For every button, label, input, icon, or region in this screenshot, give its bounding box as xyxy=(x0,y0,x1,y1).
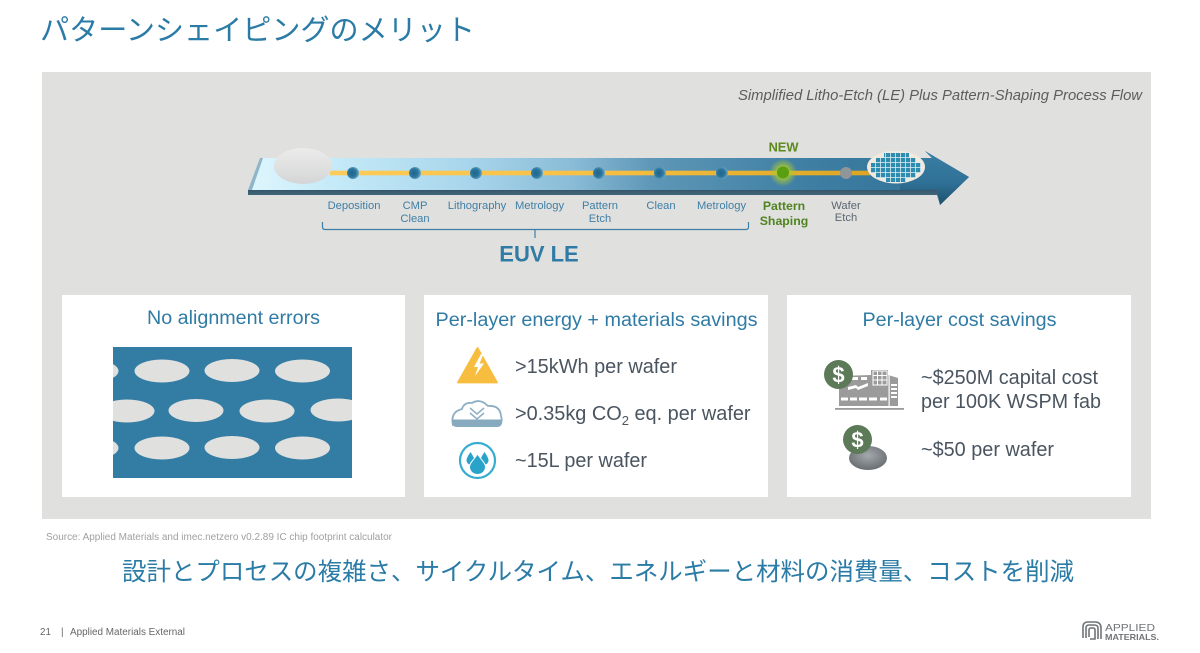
label: NEW: NEW xyxy=(769,140,799,154)
process step labels: Etch xyxy=(589,213,611,225)
process step labels: Wafer xyxy=(831,200,861,212)
panel: energy and materials savings xyxy=(424,295,768,497)
text: wafer cost: ~$50 per wafer xyxy=(921,439,1054,461)
text: capital cost: ~$250M capital cost xyxy=(921,367,1098,389)
icon: factory with dollar xyxy=(824,360,904,410)
process flow arrow xyxy=(248,148,969,205)
EUV LE bracket xyxy=(322,222,748,238)
process step labels: Clean xyxy=(646,200,676,212)
icon: water xyxy=(460,443,495,478)
icon: plain wafer xyxy=(274,148,332,184)
heading: Per-layer cost savings xyxy=(862,310,1056,331)
panel: cost savings xyxy=(787,295,1131,497)
process line xyxy=(330,171,870,175)
conclusion: 設計とプロセスの複雑さ、サイクルタイム、エネルギーと材料の消費量、コストを削減 xyxy=(122,558,1074,586)
process flow caption: Simplified Litho-Etch (LE) Plus Pattern-Shaping Process Flow xyxy=(738,88,1143,104)
process step labels: Lithography xyxy=(448,200,507,212)
process step labels xyxy=(328,199,861,228)
label: EUV LE: EUV LE xyxy=(499,242,579,266)
text: carbon: eq. per wafer xyxy=(629,403,751,425)
process step labels: Metrology xyxy=(515,200,564,212)
panel: cost savings: per 100K WSPM fab xyxy=(921,391,1101,413)
process step labels: Pattern xyxy=(582,200,618,212)
panel: process and benefits background xyxy=(42,72,1151,519)
logo: Applied Materials: MATERIALS. xyxy=(1105,632,1159,642)
process step labels: Etch xyxy=(835,212,857,224)
icon: cloud xyxy=(452,401,502,427)
logo: Applied Materials: APPLIED xyxy=(1105,622,1155,634)
text: carbon: 2 xyxy=(622,413,629,428)
text: carbon: >0.35kg CO xyxy=(515,403,622,425)
pattern diagram xyxy=(113,347,352,478)
source note: Source: Applied Materials and imec.netzero v0.2.89 IC chip footprint calculator xyxy=(46,532,393,543)
process step labels: Deposition xyxy=(328,200,380,212)
icon: wafer with dollar: $ xyxy=(851,428,864,452)
icon: patterned wafer xyxy=(867,150,925,184)
process step labels: Metrology xyxy=(697,200,746,212)
heading: Per-layer energy + materials savings xyxy=(436,310,758,331)
logo: Applied Materials xyxy=(1083,622,1159,642)
process step labels: CMP xyxy=(403,200,427,212)
footer: 21 xyxy=(40,627,51,638)
process step labels: Clean xyxy=(400,213,430,225)
icon: wafer with dollar xyxy=(843,425,887,470)
heading: No alignment errors xyxy=(147,308,320,329)
text: water: ~15L per wafer xyxy=(515,450,647,472)
process step dots xyxy=(347,158,852,186)
title: パターンシェイピングのメリット xyxy=(40,14,475,47)
process step labels: Shaping xyxy=(760,214,808,228)
icon: energy warning triangle xyxy=(458,348,497,382)
footer: Applied Materials External xyxy=(70,627,185,638)
process step labels: Pattern xyxy=(763,199,805,213)
icon: factory with dollar: $ xyxy=(832,362,845,388)
footer: | xyxy=(61,627,64,638)
panel: no alignment errors xyxy=(62,295,405,497)
text: energy: >15kWh per wafer xyxy=(515,356,677,378)
